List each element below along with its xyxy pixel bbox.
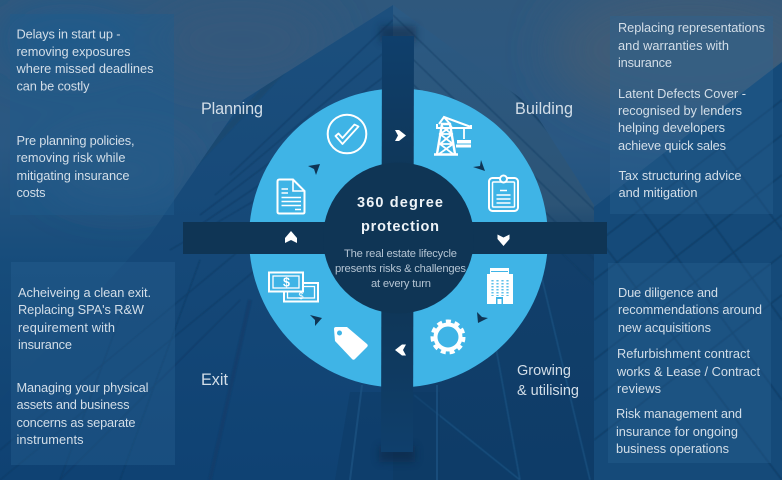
- arrow: building to gear: [477, 312, 488, 323]
- text block: pre planning: [16, 133, 134, 200]
- icon: banknotes: $: [283, 276, 290, 290]
- text block: latent defects: [618, 86, 746, 153]
- icon: banknotes: [269, 272, 318, 302]
- icon: banknotes: $: [298, 291, 304, 301]
- arrow: tag to money: [310, 315, 322, 326]
- arrow: chevron left: [395, 344, 406, 356]
- panel: building details: [610, 16, 773, 214]
- text block: latent defects: Latent Defects Cover -: [618, 86, 746, 101]
- text block: physical assets: Managing your physical: [16, 380, 148, 395]
- icon: price tag: [334, 327, 368, 360]
- text block: due diligence: new acquisitions: [618, 320, 711, 335]
- center text: [335, 195, 466, 290]
- arrow: crane to clipboard: [473, 160, 485, 171]
- arrow: chevron down: [498, 234, 510, 246]
- center text: 360 degree: [357, 195, 443, 211]
- text block: delays: where missed deadlines: [16, 61, 154, 76]
- text block: physical assets: [16, 380, 148, 447]
- text block: tax structuring: [618, 168, 742, 200]
- heading: Exit: Exit: [201, 371, 228, 389]
- heading: Growing & utilising: & utilising: [517, 383, 579, 399]
- text block: latent defects: achieve quick sales: [618, 138, 726, 153]
- icon: document: [278, 180, 304, 214]
- icon: check circle: [328, 115, 366, 153]
- text block: latent defects: recognised by lenders: [618, 103, 742, 118]
- panel: exit details: [11, 262, 175, 465]
- horizontal bar: [183, 222, 607, 254]
- text block: representations: and warranties with: [618, 38, 729, 53]
- text block: pre planning: costs: [16, 185, 46, 200]
- text block: due diligence: recommendations around: [618, 302, 762, 317]
- text block: risk management: business operations: [616, 441, 729, 456]
- heading: Building: Building: [515, 100, 573, 118]
- text block: risk management: Risk management and: [616, 406, 742, 421]
- text block: tax structuring: Tax structuring advice: [618, 168, 742, 183]
- text block: clean exit: [18, 285, 151, 352]
- text block: refurbishment: [616, 346, 760, 396]
- icon: office building: [487, 268, 513, 304]
- center text: at every turn: [371, 278, 431, 290]
- text block: tax structuring: and mitigation: [618, 185, 698, 200]
- vertical bar: [379, 26, 416, 462]
- text block: delays: Delays in start up -: [16, 26, 120, 42]
- text block: refurbishment: works & Lease / Contract: [616, 364, 760, 379]
- text block: due diligence: Due diligence and: [618, 285, 718, 300]
- panel: planning details: [10, 14, 174, 215]
- panel: growing details: [608, 263, 771, 463]
- text block: representations: insurance: [618, 55, 672, 70]
- text block: delays: can be costly: [16, 78, 90, 94]
- center circle: [323, 162, 474, 314]
- center text: The real estate lifecycle: [344, 248, 457, 260]
- arrow: planning to check: [308, 164, 320, 175]
- lifecycle ring: [249, 88, 548, 388]
- text block: clean exit: insurance: [18, 337, 72, 352]
- center text: protection: [361, 219, 439, 235]
- text block: clean exit: requirement with: [18, 320, 115, 335]
- text block: latent defects: helping developers: [618, 120, 725, 135]
- arrow: chevron right: [395, 130, 406, 141]
- text block: physical assets: assets and business: [16, 397, 130, 412]
- icon: crane: [434, 117, 471, 154]
- text block: pre planning: mitigating insurance: [16, 168, 130, 183]
- icon: clipboard: [489, 176, 518, 211]
- icon: gear: [432, 322, 464, 352]
- text block: due diligence: [618, 285, 762, 335]
- text block: pre planning: Pre planning policies,: [16, 133, 134, 148]
- heading: Growing & utilising: [517, 363, 579, 399]
- text block: clean exit: Replacing SPA's R&W: [18, 302, 145, 317]
- heading: Growing & utilising: Growing: [517, 363, 571, 379]
- text block: representations: Replacing representations: [618, 20, 765, 35]
- text block: risk management: [616, 406, 742, 456]
- text block: refurbishment: reviews: [617, 381, 661, 396]
- text block: delays: [16, 26, 154, 94]
- text block: clean exit: Acheiveing a clean exit.: [18, 285, 151, 300]
- text block: refurbishment: Refurbishment contract: [617, 346, 750, 361]
- text block: delays: removing exposures: [16, 44, 130, 59]
- text block: physical assets: concerns as separate: [16, 415, 136, 430]
- center text: presents risks & challenges: [335, 263, 466, 275]
- text block: pre planning: removing risk while: [16, 150, 126, 165]
- text block: risk management: insurance for ongoing: [616, 424, 738, 439]
- text block: physical assets: instruments: [16, 432, 84, 447]
- text block: representations: [618, 20, 765, 70]
- heading: Planning: Planning: [201, 100, 263, 118]
- arrow: chevron up: [285, 231, 297, 243]
